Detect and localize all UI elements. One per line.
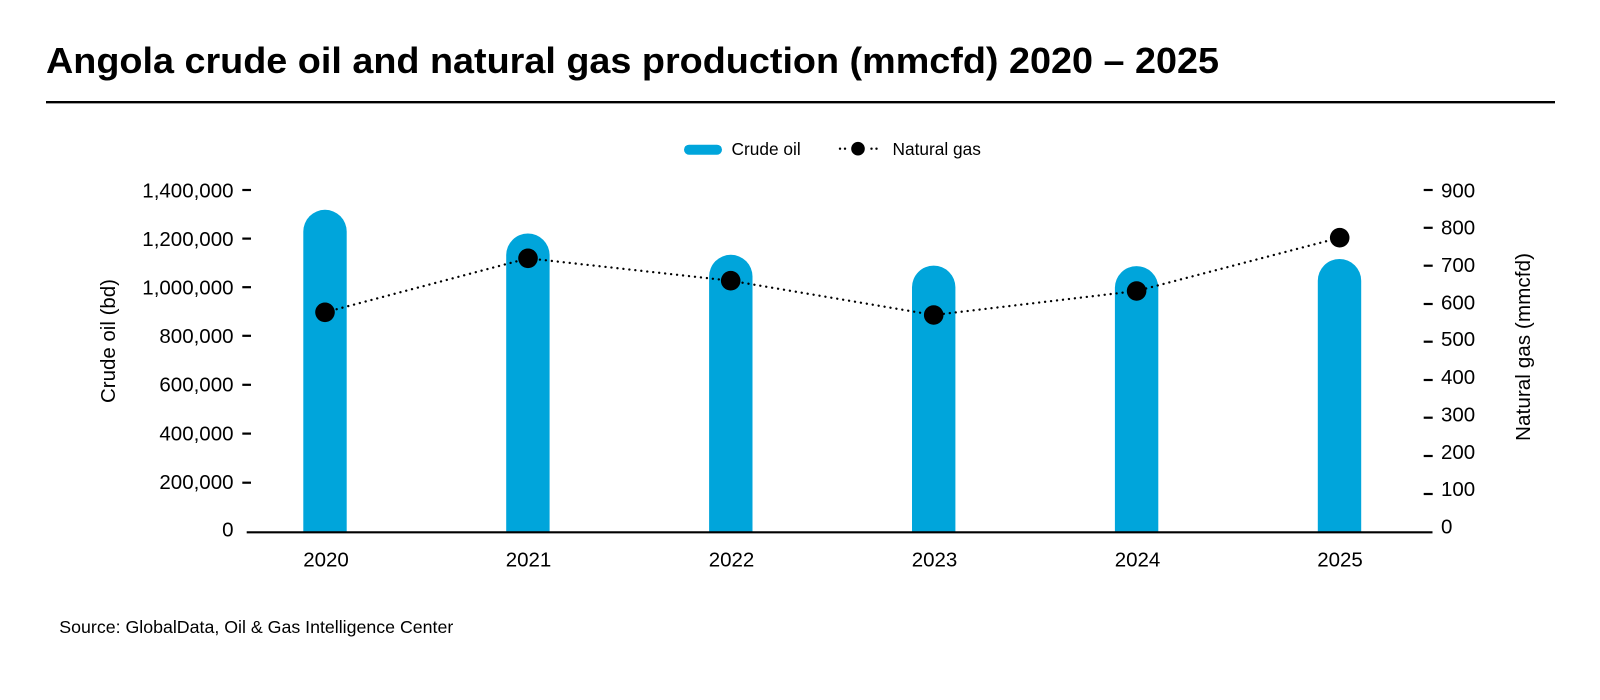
right axis: natural gas bbox=[1424, 179, 1475, 539]
right axis: natural gas: 100 bbox=[1441, 478, 1475, 501]
right axis: natural gas: 700 bbox=[1441, 254, 1475, 277]
title: Angola crude oil and natural gas production (mmcfd) 2020 – 2025 bbox=[46, 40, 1219, 81]
right axis: natural gas: 200 bbox=[1441, 441, 1475, 464]
left axis: crude oil: 200,000 bbox=[159, 471, 234, 494]
left axis: crude oil: 1,000,000 bbox=[142, 276, 234, 300]
left axis: crude oil: 800,000 bbox=[159, 325, 234, 348]
legend: crude oil: Crude oil bbox=[732, 139, 801, 159]
left axis: crude oil: 400,000 bbox=[159, 422, 234, 445]
right axis: natural gas: 300 bbox=[1441, 403, 1475, 426]
right axis: natural gas: 900 bbox=[1441, 179, 1475, 202]
x axis bbox=[247, 532, 1433, 571]
right axis: natural gas: 400 bbox=[1441, 366, 1475, 389]
legend: crude oil bbox=[684, 139, 801, 159]
legend: natural gas: Natural gas bbox=[892, 139, 981, 159]
x axis: 2022 bbox=[709, 548, 754, 571]
left axis: crude oil: 600,000 bbox=[159, 374, 234, 397]
left axis title: Crude oil (bd) bbox=[97, 279, 120, 403]
x axis: 2025 bbox=[1317, 548, 1363, 571]
right axis: natural gas: 600 bbox=[1441, 291, 1475, 314]
left axis: crude oil: 1,400,000 bbox=[142, 179, 234, 202]
x axis: 2023 bbox=[912, 548, 957, 571]
left axis: crude oil: 0 bbox=[222, 518, 234, 542]
right axis: natural gas: 800 bbox=[1441, 216, 1475, 240]
bars: crude oil bbox=[303, 210, 1361, 532]
line: natural gas bbox=[315, 228, 1350, 325]
right axis: natural gas: 500 bbox=[1441, 328, 1475, 351]
x axis: 2024 bbox=[1115, 548, 1160, 571]
legend: natural gas bbox=[839, 139, 981, 159]
right axis: natural gas: 0 bbox=[1441, 516, 1452, 538]
x axis: 2020 bbox=[303, 548, 349, 571]
source note: Source: GlobalData, Oil & Gas Intelligence Center bbox=[59, 617, 453, 637]
left axis: crude oil bbox=[142, 179, 251, 542]
x axis: 2021 bbox=[506, 548, 551, 571]
right axis title: Natural gas (mmcfd) bbox=[1512, 253, 1535, 441]
legend bbox=[684, 139, 981, 159]
left axis: crude oil: 1,200,000 bbox=[142, 228, 234, 251]
